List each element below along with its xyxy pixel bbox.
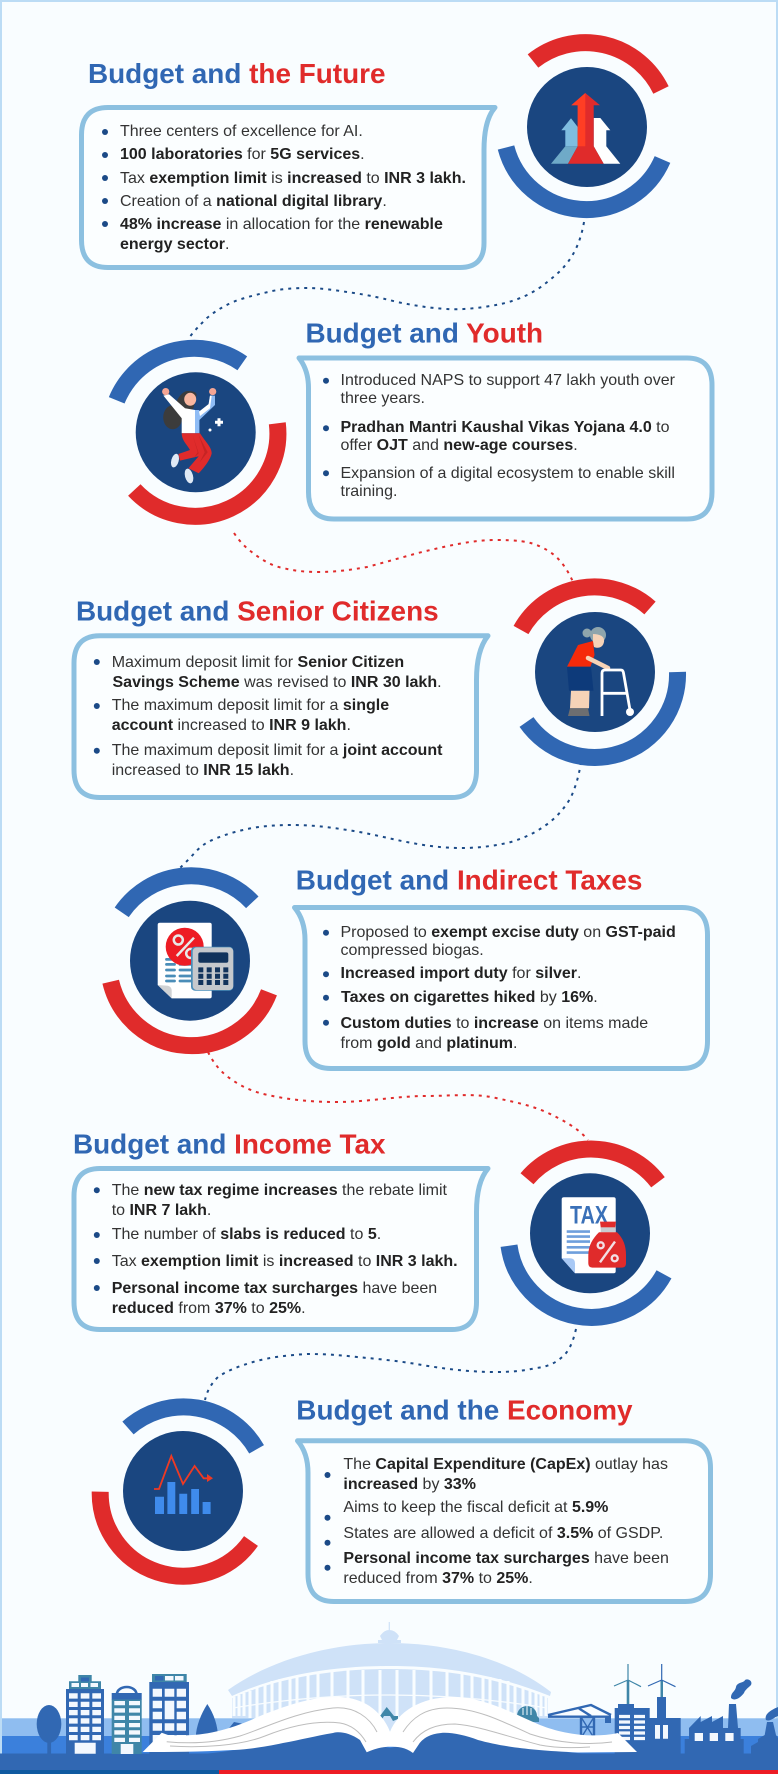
icon: bar chart with trend line in ring — [100, 1407, 257, 1576]
icon: jumping girl in ring — [117, 348, 278, 516]
bullet list: income tax: to INR 7 lakh. — [112, 1202, 211, 1219]
bullet list: senior citizens: Maximum deposit limit for Senior Citizen — [112, 654, 404, 671]
bullet list: economy: reduced from 37% to 25%. — [343, 1570, 533, 1587]
bullet list: indirect taxes: Increased import duty for silver. — [340, 965, 581, 982]
icon: tax sheet and money bag in ring: TAX — [570, 1201, 608, 1229]
bullet list: youth: Expansion of a digital ecosystem to enable skill — [340, 465, 675, 482]
panel: budget and income tax — [73, 1129, 664, 1330]
bullet list: income tax: The number of slabs is reduced to 5. — [112, 1226, 381, 1243]
heading: budget and the economy: Budget and the Economy — [296, 1394, 633, 1425]
callout box: economy — [298, 1441, 710, 1602]
callout box: indirect taxes — [294, 908, 708, 1068]
bullet list: economy: States are allowed a deficit of 3.5% of GSDP. — [343, 1525, 663, 1542]
panel: budget and youth — [117, 318, 712, 519]
heading: budget and youth: Budget and Youth — [306, 318, 543, 349]
panel: budget and indirect taxes — [111, 864, 707, 1068]
dotted connector: indirect taxes to income tax — [208, 1052, 588, 1140]
bullet list: senior citizens: increased to INR 15 lakh. — [112, 762, 294, 779]
panel: budget and the future — [82, 43, 662, 268]
buildings: right, crane, windmills and factories — [548, 1664, 778, 1754]
bullet list: economy: The Capital Expenditure (CapEx) outlay has — [343, 1456, 668, 1473]
bullet list: indirect taxes: Proposed to exempt excise duty on GST-paid — [340, 924, 676, 941]
icon: senior with walker in ring — [521, 587, 678, 757]
icon: rising arrows in ring — [506, 43, 662, 210]
buildings: left — [37, 1674, 218, 1754]
bullet list: youth: training. — [340, 483, 397, 500]
bullet list: youth: Introduced NAPS to support 47 lakh youth over — [340, 372, 676, 389]
bullet list: indirect taxes: compressed biogas. — [340, 942, 484, 959]
icon: tax sheet and money bag in ring — [509, 1149, 664, 1317]
dotted connector: senior citizens to indirect taxes — [180, 762, 581, 868]
bullet list: future: 48% increase in allocation for the renewable — [120, 216, 443, 233]
heading: budget and income tax: Budget and Income Tax — [73, 1129, 386, 1160]
callout box: income tax — [74, 1168, 488, 1330]
bullet list: future — [102, 123, 466, 253]
bullet list: future: energy sector. — [120, 236, 229, 253]
panel: budget and the economy — [100, 1394, 710, 1602]
bullet list: youth: offer OJT and new-age courses. — [340, 437, 578, 454]
bullet list: indirect taxes: from gold and platinum. — [340, 1035, 517, 1052]
bullet list: income tax: Personal income tax surcharges have been — [112, 1280, 437, 1297]
bullet list: indirect taxes: Taxes on cigarettes hiked by 16%. — [341, 989, 598, 1006]
bullet list: youth — [323, 372, 676, 500]
bullet list: future: Creation of a national digital library. — [120, 193, 387, 210]
footer: cityscape, parliament and open book — [0, 1622, 778, 1774]
callout box: youth — [299, 358, 712, 519]
open book — [143, 1697, 637, 1754]
bullet list: youth: Pradhan Mantri Kaushal Vikas Yojana 4.0 to — [340, 419, 670, 436]
bullet list: income tax — [94, 1182, 458, 1317]
bullet list: income tax: The new tax regime increases the rebate limit — [112, 1182, 448, 1199]
bullet list: future: Tax exemption limit is increased to INR 3 lakh. — [120, 170, 466, 187]
heading: budget and the future: Budget and the Future — [88, 58, 386, 89]
bullet list: senior citizens: The maximum deposit limit for a joint account — [112, 742, 443, 759]
bullet list: economy: Personal income tax surcharges have been — [343, 1550, 669, 1567]
bullet list: indirect taxes: Custom duties to increase on items made — [340, 1015, 648, 1032]
ground bands — [0, 1718, 778, 1774]
dotted connector: youth to senior citizens — [234, 533, 573, 582]
bullet list: income tax: reduced from 37% to 25%. — [112, 1300, 306, 1317]
dotted connector: future to youth — [189, 222, 584, 338]
bullet list: senior citizens: account increased to INR 9 lakh. — [112, 717, 351, 734]
dotted connector: income tax to economy — [205, 1329, 576, 1400]
panel: budget and senior citizens — [74, 587, 678, 798]
bullet list: economy — [324, 1456, 669, 1587]
parliament building — [226, 1622, 551, 1738]
heading: budget and indirect taxes: Budget and Indirect Taxes — [296, 864, 642, 895]
heading: budget and senior citizens: Budget and Senior Citizens — [76, 596, 439, 627]
bullet list: youth: three years. — [340, 390, 425, 407]
bullet list: future: 100 laboratories for 5G services. — [120, 146, 365, 163]
callout box: senior citizens — [74, 636, 488, 798]
callout box: future — [82, 108, 495, 268]
bullet list: senior citizens: Savings Scheme was revised to INR 30 lakh. — [112, 674, 442, 691]
bullet list: economy: Aims to keep the fiscal deficit at 5.9% — [343, 1499, 608, 1516]
icon: tax sheet and calculator in ring — [111, 876, 269, 1046]
bullet list: senior citizens: The maximum deposit limit for a single — [112, 697, 389, 714]
bullet list: senior citizens — [94, 654, 443, 779]
bullet list: economy: increased by 33% — [343, 1476, 476, 1493]
bullet list: income tax: Tax exemption limit is increased to INR 3 lakh. — [112, 1253, 458, 1270]
bullet list: future: Three centers of excellence for AI. — [120, 123, 363, 140]
bullet list: indirect taxes — [323, 924, 676, 1052]
